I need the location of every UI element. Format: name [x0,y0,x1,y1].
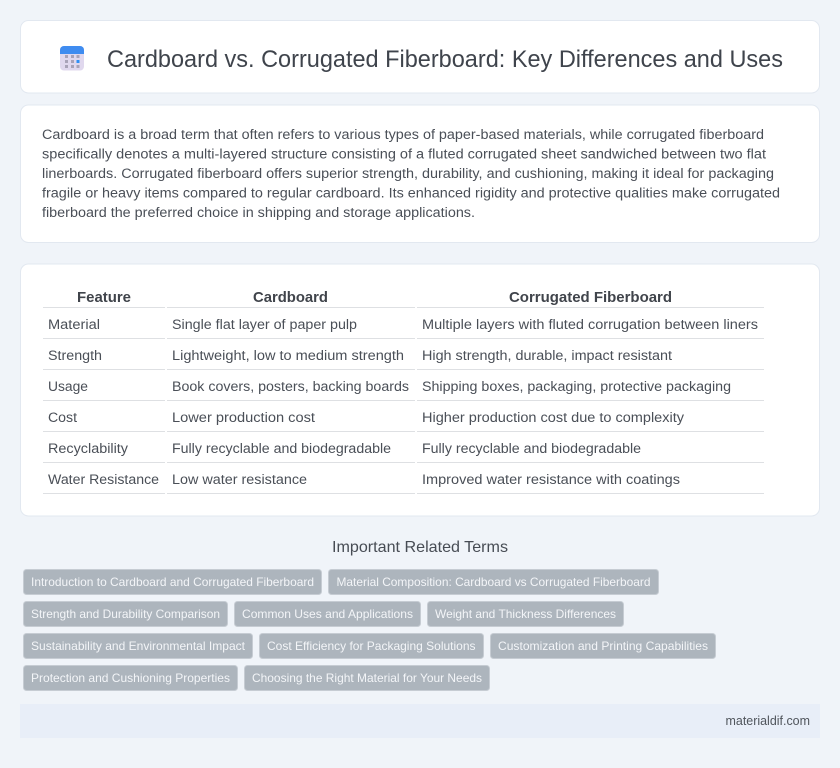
tag: common uses [234,602,420,626]
table row: recyclability [43,441,764,463]
tag: material composition [328,570,658,594]
table row: water resistance [43,472,764,494]
title: Cardboard vs. Corrugated Fiberboard: Key Differences and Uses [107,46,783,73]
table row: cost: Cost [48,410,77,426]
footer source: materialdif.com [726,714,810,728]
table row: material [43,317,764,339]
table header row: Corrugated Fiberboard [509,290,672,306]
table header row: Cardboard [253,290,328,306]
text block: description: fiberboard the preferred choice in shipping and storage applications. [42,205,475,221]
tag list: related terms [24,570,716,690]
text block: description: Cardboard is a broad term that often refers to various types of paper-based materials, while corrugated fiberboard [42,127,764,143]
table row: usage: Book covers, posters, backing boards [172,379,409,395]
tag: introduction: Introduction to Cardboard and Corrugated Fiberboard [31,575,314,589]
table header row: Feature [77,290,131,306]
table row: water resistance: Water Resistance [48,472,159,488]
tag: cost efficiency: Cost Efficiency for Packaging Solutions [267,639,476,653]
tag: cost efficiency [260,634,484,658]
panel: title header [20,20,820,93]
table row: water resistance: Low water resistance [172,472,307,488]
tag: material composition: Material Composition: Cardboard vs Corrugated Fiberboard [336,575,650,589]
tag: introduction [24,570,322,594]
tag: protection [24,666,238,690]
tag: common uses: Common Uses and Applications [242,607,413,621]
text block: description: fragile or heavy items compared to regular cardboard. Its enhanced rigidity and protective qualities make corrugated [42,186,780,202]
table row: strength [43,348,764,370]
table header row [43,290,764,308]
table row: material: Multiple layers with fluted corrugation between liners [422,317,758,333]
footer bar [20,704,820,738]
tag: choosing material [244,666,490,690]
table row: strength: Lightweight, low to medium strength [172,348,404,364]
tag: strength and durability [24,602,228,626]
tag: customization: Customization and Printing Capabilities [498,639,708,653]
tag: strength and durability: Strength and Durability Comparison [31,607,220,621]
table row: material: Material [48,317,100,333]
heading: important related terms: Important Related Terms [332,539,508,556]
panel: comparison table [20,264,820,516]
tag: choosing material: Choosing the Right Material for Your Needs [252,671,482,685]
table row: material: Single flat layer of paper pulp [172,317,357,333]
tag: customization [490,634,716,658]
table row: usage [43,379,764,401]
tag: weight and thickness [428,602,624,626]
table row: recyclability: Recyclability [48,441,129,457]
table row: recyclability: Fully recyclable and biodegradable [172,441,391,457]
table row: water resistance: Improved water resistance with coatings [422,472,680,488]
table row: cost [43,410,764,432]
tag: weight and thickness: Weight and Thickness Differences [435,607,616,621]
tag: protection: Protection and Cushioning Properties [31,671,230,685]
table row: usage: Usage [48,379,88,395]
tag: sustainability [24,634,252,658]
tag: sustainability: Sustainability and Environmental Impact [31,639,246,653]
text block: description: specifically denotes a multi-layered structure consisting of a fluted corrugated sheet sandwiched between two flat [42,146,766,162]
table row: usage: Shipping boxes, packaging, protective packaging [422,379,731,395]
table row: cost: Lower production cost [172,410,315,426]
table row: strength: High strength, durable, impact resistant [422,348,672,364]
text block: description [42,127,780,221]
table row: recyclability: Fully recyclable and biodegradable [422,441,641,457]
icon: calendar grid [60,46,84,70]
text block: description: linerboards. Corrugated fiberboard offers superior strength, durability, and cushioning, making it ideal for packaging [42,166,774,182]
table row: strength: Strength [48,348,102,364]
panel: intro paragraph [20,105,820,242]
table row: cost: Higher production cost due to complexity [422,410,685,426]
